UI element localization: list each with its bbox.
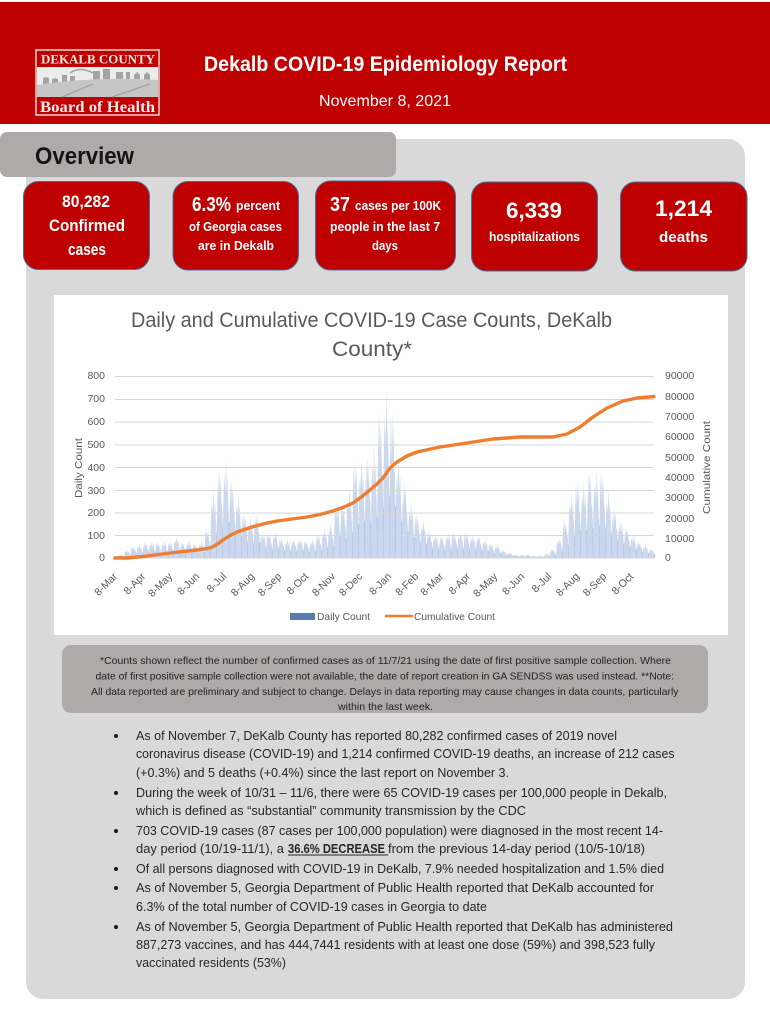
- stat card: cases per 100K: [316, 181, 456, 270]
- date axis labels: 8-Sep: [581, 571, 609, 599]
- right axis labels: 20000: [665, 513, 694, 525]
- left axis labels: 800: [87, 370, 105, 382]
- date axis labels: 8-Jul: [205, 571, 229, 595]
- data note callout: [62, 645, 708, 713]
- bullet list: key findings: During the week of 10/31 – 11/6, there were 65 COVID-19 cases per 100,000 people in Dekalb,: [136, 785, 667, 800]
- right axis labels: 90000: [665, 370, 694, 382]
- right axis labels: 30000: [665, 492, 694, 504]
- heading bar: Overview: [0, 132, 396, 177]
- panel: overview background: [26, 139, 745, 999]
- data note callout: within the last week.: [337, 701, 433, 713]
- date axis labels: 8-Dec: [337, 571, 365, 599]
- date axis labels: 8-Jan: [367, 571, 394, 598]
- bullet list: key findings: As of November 5, Georgia Department of Public Health reported that DeKalb has administered: [136, 919, 673, 934]
- stat card: percent of Georgia cases: 6.3%: [192, 194, 231, 216]
- right axis title: Cumulative Count: [701, 421, 713, 514]
- stat card: confirmed cases: cases: [68, 240, 106, 259]
- right axis labels: [665, 370, 694, 564]
- date axis labels: 8-May: [146, 570, 176, 600]
- date axis labels: 8-Apr: [446, 570, 473, 597]
- left axis labels: 600: [87, 416, 105, 428]
- report title: Dekalb COVID-19 Epidemiology Report: [204, 52, 567, 76]
- stat card: percent of Georgia cases: are in Dekalb: [198, 239, 274, 253]
- date axis labels: 8-Jul: [530, 571, 554, 595]
- chart legend: [290, 611, 495, 623]
- panel: daily and cumulative chart: [54, 295, 728, 635]
- daily count bars: [118, 387, 655, 558]
- chart title: [131, 309, 612, 361]
- date axis labels: 8-Apr: [121, 570, 148, 597]
- left axis labels: 200: [87, 507, 105, 519]
- date axis labels: 8-Mar: [92, 570, 120, 599]
- right axis labels: 10000: [665, 533, 694, 545]
- chart legend: Cumulative Count: [414, 611, 495, 623]
- data note callout: date of first positive sample collection were not available, the date of report creation in GA SENDSS was used instead. **Note:: [96, 670, 674, 682]
- logo: DeKalb County Board of Health: [36, 50, 159, 116]
- right axis labels: 80000: [665, 391, 694, 403]
- chart legend: Daily Count: [317, 611, 370, 623]
- right axis labels: 40000: [665, 472, 694, 484]
- stat card: percent of Georgia cases: percent: [236, 199, 281, 213]
- chart title: County*: [332, 338, 412, 361]
- stat card: percent of Georgia cases: [173, 182, 298, 270]
- stat card: confirmed cases: 80,282: [62, 192, 110, 211]
- data note callout: *Counts shown reflect the number of confirmed cases as of 11/7/21 using the date of first positive sample collection. Where: [100, 655, 671, 667]
- bullet list: key findings: which is defined as “substantial” community transmission by the CDC: [135, 803, 526, 818]
- stat card: hospitalizations: [472, 182, 598, 271]
- left axis labels: 300: [87, 485, 105, 497]
- bullet list: key findings: from the previous 14-day period (10/5-10/18): [388, 841, 645, 856]
- stat card: confirmed cases: Confirmed: [49, 216, 125, 235]
- left axis labels: 500: [87, 439, 105, 451]
- stat card: cases per 100K: people in the last 7: [330, 220, 440, 234]
- right axis labels: 60000: [665, 431, 694, 443]
- date axis labels: 8-Oct: [284, 571, 311, 597]
- date axis labels: 8-Jun: [500, 571, 527, 598]
- right axis labels: 0: [665, 552, 671, 564]
- bullet list: key findings: coronavirus disease (COVID-19) and 1,214 confirmed COVID-19 deaths, an increase of 212 cases: [136, 746, 675, 761]
- date axis labels: [92, 570, 636, 600]
- stat card: hospitalizations: 6,339: [506, 198, 562, 223]
- stat card: confirmed cases: [24, 182, 150, 270]
- left axis labels: 0: [99, 552, 105, 564]
- bullet list: key findings: 6.3% of the total number of COVID-19 cases in Georgia to date: [136, 899, 487, 914]
- bullet list: key findings: As of November 5, Georgia Department of Public Health reported that DeKalb accounted for: [136, 880, 655, 895]
- left axis labels: 700: [87, 393, 105, 405]
- stat card: hospitalizations: hospitalizations: [489, 230, 580, 244]
- stat card: cases per 100K: cases per 100K: [355, 199, 441, 213]
- left axis labels: 400: [87, 462, 105, 474]
- bullet list: key findings: (+0.3%) and 5 deaths (+0.4%) since the last report on November 3.: [136, 765, 509, 780]
- cumulative count line: [115, 396, 654, 558]
- data note callout: All data reported are preliminary and subject to change. Delays in data reporting may cause changes in data counts, particularly: [91, 686, 679, 698]
- left axis title: Daily Count: [73, 438, 85, 498]
- date axis labels: 8-Feb: [393, 571, 421, 599]
- stat card: cases per 100K: days: [372, 239, 398, 253]
- date axis labels: 8-Sep: [256, 571, 284, 599]
- date axis labels: 8-Aug: [229, 571, 257, 599]
- bullet list: key findings: vaccinated residents (53%): [136, 955, 286, 970]
- report date: November 8, 2021: [319, 93, 451, 110]
- left axis labels: [87, 370, 105, 564]
- date axis labels: 8-Jun: [175, 571, 202, 598]
- right axis labels: 70000: [665, 411, 694, 423]
- stat card: cases per 100K: 37: [330, 194, 350, 216]
- heading bar: Overview: Overview: [35, 143, 134, 170]
- bullet list: key findings: Of all persons diagnosed with COVID-19 in DeKalb, 7.9% needed hospitalization and 1.5% died: [136, 861, 664, 876]
- date axis labels: 8-Nov: [310, 570, 339, 599]
- logo: DeKalb County Board of Health: DEKALB COUNTY: [41, 52, 155, 66]
- header banner: [0, 2, 770, 124]
- date axis labels: 8-Aug: [554, 571, 582, 599]
- stat card: deaths: 1,214: [655, 196, 713, 221]
- logo: DeKalb County Board of Health: Board of Health: [40, 99, 155, 116]
- stat card: percent of Georgia cases: of Georgia cases: [189, 220, 282, 234]
- date axis labels: 8-Oct: [609, 571, 636, 597]
- right axis labels: 50000: [665, 452, 694, 464]
- bullet list: key findings: 887,273 vaccines, and has 444,7441 residents with at least one dose (59%) and 398,523 fully: [136, 937, 655, 952]
- bullet list: key findings: 36.6% DECREASE: [288, 841, 385, 856]
- date axis labels: 8-Mar: [418, 570, 446, 599]
- date axis labels: 8-May: [471, 570, 501, 600]
- bullet list: key findings: [114, 728, 675, 970]
- chart title: Daily and Cumulative COVID-19 Case Counts, DeKalb: [131, 309, 612, 332]
- bullet list: key findings: As of November 7, DeKalb County has reported 80,282 confirmed cases of 2019 novel: [136, 728, 617, 743]
- stat card: deaths: deaths: [659, 229, 708, 246]
- left axis labels: 100: [87, 530, 105, 542]
- bullet list: key findings: 703 COVID-19 cases (87 cases per 100,000 population) were diagnosed in the most recent 14-: [136, 823, 663, 838]
- bullet list: key findings: day period (10/19-11/1), a: [136, 841, 285, 856]
- stat card: deaths: [620, 182, 747, 271]
